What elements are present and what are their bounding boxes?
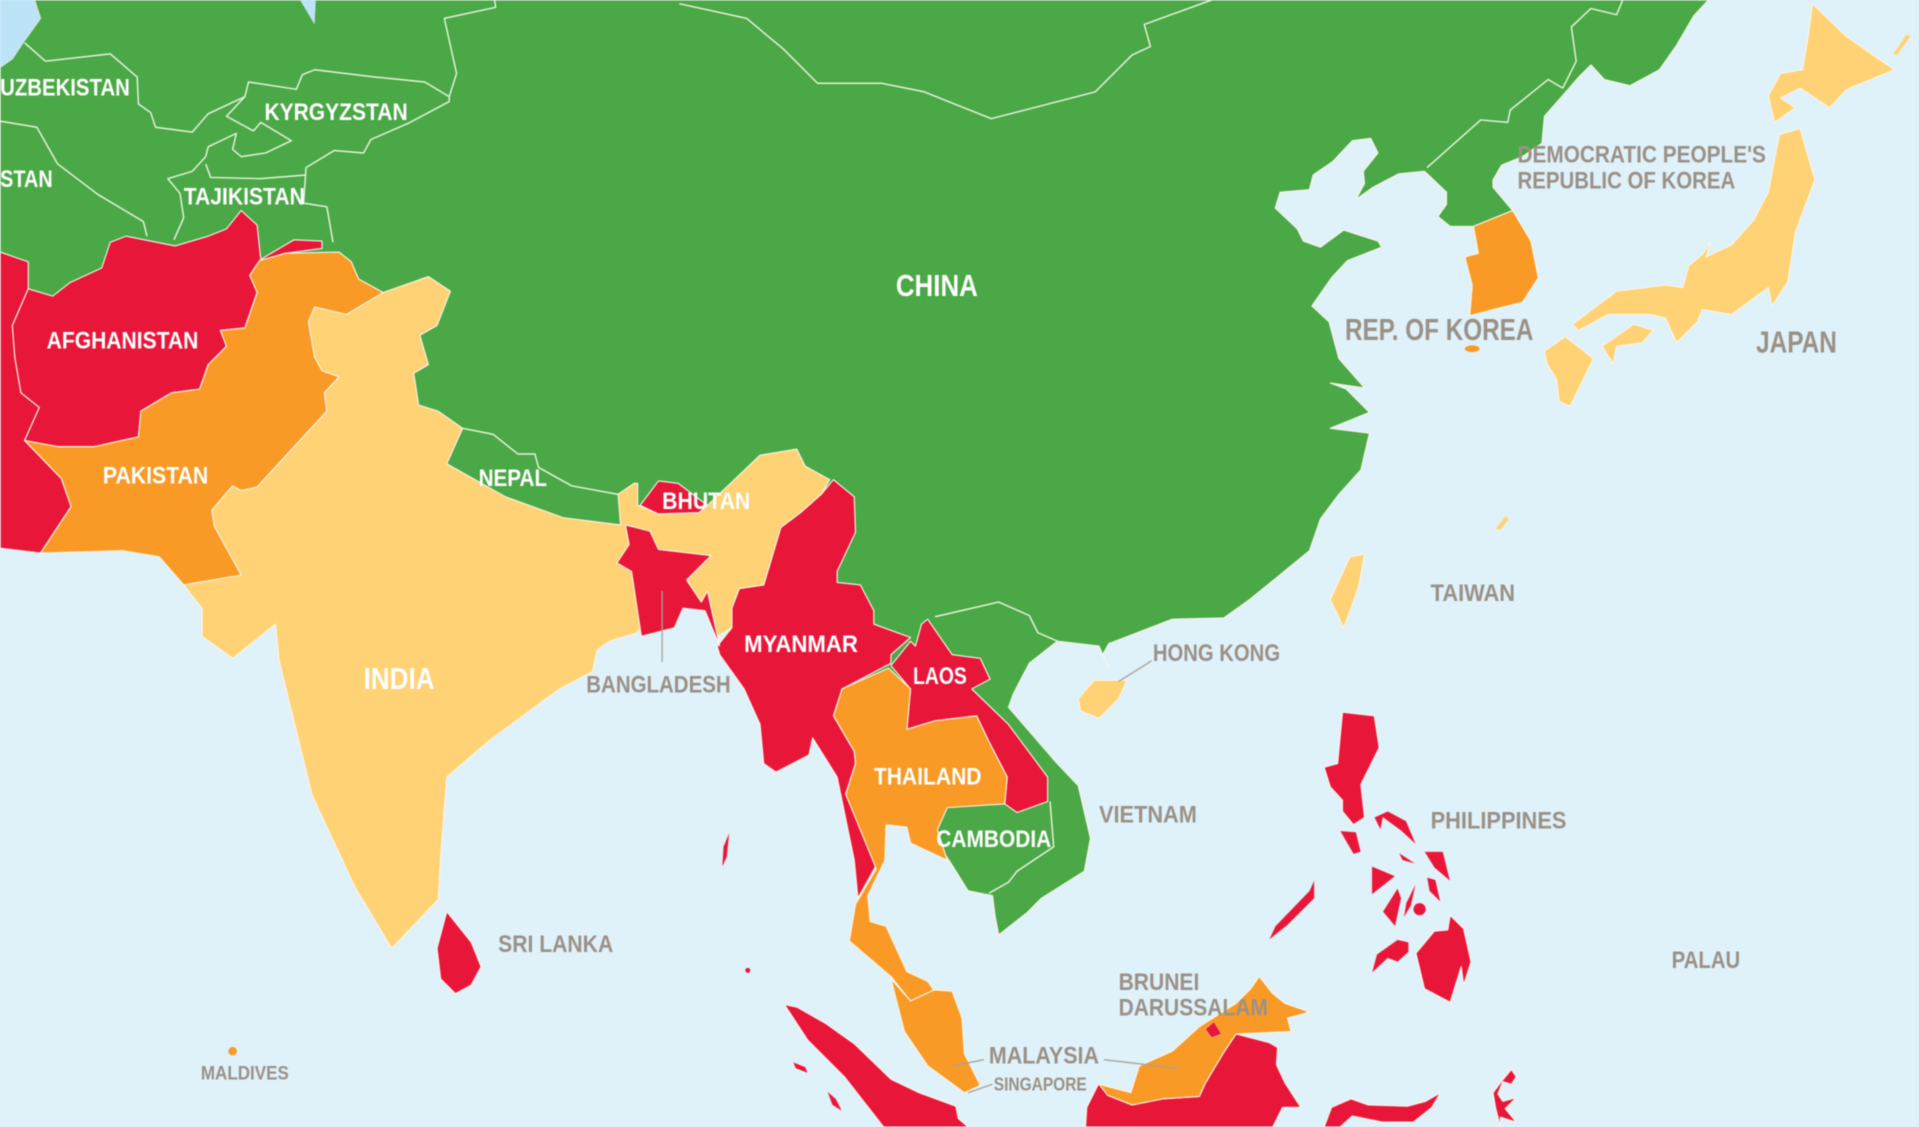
Japan: Kuril island xyxy=(1893,34,1910,55)
Sumatra xyxy=(785,1005,968,1127)
label: Kyrgyzstan: KYRGYZSTAN xyxy=(264,99,408,126)
Philippines: Bohol xyxy=(1413,903,1426,915)
Japan: Hokkaido xyxy=(1768,4,1894,122)
label: Japan: JAPAN xyxy=(1756,325,1837,359)
land: green countries (China, Central Asia, Mongolia, Russia, DPRK, Vietnam, Cambodia, Nepal) xyxy=(0,0,1708,935)
label: India: INDIA xyxy=(364,662,435,696)
Kalimantan xyxy=(1086,1034,1301,1127)
label: Afghanistan: AFGHANISTAN xyxy=(47,328,198,355)
label: Republic of Korea: REP. OF KOREA xyxy=(1345,313,1533,347)
Sulawesi xyxy=(1324,1093,1440,1127)
Andaman Islands xyxy=(722,832,729,868)
Hainan xyxy=(1078,680,1127,718)
label: China: CHINA xyxy=(896,269,978,303)
label: Singapore: SINGAPORE xyxy=(994,1073,1087,1094)
Pakistan xyxy=(25,252,383,585)
Philippines: Samar xyxy=(1424,852,1450,881)
label: Myanmar: MYANMAR xyxy=(744,631,858,658)
Japan: Honshu xyxy=(1573,128,1815,343)
label: DPRK: REPUBLIC OF KOREA xyxy=(1517,167,1736,194)
leader lines xyxy=(662,591,1177,1093)
label: Cambodia: CAMBODIA xyxy=(936,826,1052,853)
Japan: Shikoku xyxy=(1602,324,1653,363)
Philippines: Mindanao xyxy=(1416,915,1471,1002)
water: Lake Balkhash xyxy=(300,0,316,24)
label: Thailand: THAILAND xyxy=(874,763,982,790)
label: Brunei Darussalam: DARUSSALAM xyxy=(1119,995,1268,1022)
label: Brunei Darussalam xyxy=(1119,969,1268,1022)
Maluku xyxy=(1493,1069,1516,1127)
land: pale yellow countries (India, Japan, Taiwan, Hainan) plus Bangladesh and Bhutan xyxy=(184,4,1910,948)
labels: grey country names xyxy=(201,142,1837,1094)
Japan: Ryukyu islands xyxy=(1495,516,1509,530)
label: Pakistan: PAKISTAN xyxy=(103,462,208,489)
label: Vietnam: VIETNAM xyxy=(1099,801,1197,828)
Thailand xyxy=(833,668,1007,1001)
Philippines: Masbate xyxy=(1399,853,1416,864)
Malaysia: Borneo xyxy=(1099,976,1309,1105)
land: orange countries (Pakistan, Thailand, Malaysia, Republic of Korea, Maldives) xyxy=(25,210,1538,1105)
borders: Central and East Asia boundary lines xyxy=(0,0,1623,893)
label: DPRK: DEMOCRATIC PEOPLE'S xyxy=(1517,142,1766,169)
Maldives xyxy=(228,1047,237,1055)
Jeju xyxy=(1465,345,1480,352)
Sumatra outer islands xyxy=(793,1062,808,1073)
land: red countries (Iran, Afghanistan, Myanmar, Laos, Sri Lanka, Indonesia, Philippines) xyxy=(0,210,1516,1127)
label: Taiwan: TAIWAN xyxy=(1431,580,1515,607)
Philippines: Luzon xyxy=(1324,712,1379,825)
Brunei xyxy=(1205,1022,1221,1038)
Laos xyxy=(891,619,1048,813)
Taiwan xyxy=(1330,554,1365,628)
Sri Lanka xyxy=(437,912,481,994)
label: Turkmenistan (cropped): STAN xyxy=(0,166,53,193)
label: Hong Kong: HONG KONG xyxy=(1153,640,1280,667)
label: Malaysia: MALAYSIA xyxy=(989,1042,1099,1069)
label: Maldives: MALDIVES xyxy=(201,1062,289,1084)
Nicobar island xyxy=(745,968,750,973)
Bangladesh xyxy=(617,525,720,646)
water: Caspian Sea xyxy=(0,0,41,67)
Republic of Korea xyxy=(1465,210,1538,316)
label: Bhutan: BHUTAN xyxy=(662,488,750,515)
label: Philippines: PHILIPPINES xyxy=(1431,807,1566,834)
label: Bangladesh: BANGLADESH xyxy=(586,672,731,699)
label: Sri Lanka: SRI LANKA xyxy=(498,931,613,958)
label: DPRK xyxy=(1517,142,1766,194)
Iran xyxy=(0,252,71,553)
Bhutan xyxy=(640,481,707,514)
Philippines: Mindoro xyxy=(1340,831,1361,854)
label: Palau: PALAU xyxy=(1672,947,1740,974)
label: Laos: LAOS xyxy=(913,663,967,690)
Myanmar xyxy=(717,480,911,898)
label: Tajikistan: TAJIKISTAN xyxy=(184,183,305,210)
Sumatra outer island south xyxy=(827,1092,842,1111)
India xyxy=(184,277,830,948)
label: Uzbekistan: UZBEKISTAN xyxy=(0,74,130,101)
Japan: Kyushu xyxy=(1544,337,1593,406)
Philippines: Negros xyxy=(1383,888,1401,926)
Philippines: Panay xyxy=(1372,866,1395,895)
Philippines: Bicol xyxy=(1374,811,1416,844)
Philippines: Leyte xyxy=(1427,877,1440,902)
Malaysia: peninsula xyxy=(891,979,980,1093)
Afghanistan xyxy=(12,210,322,447)
Philippines: Zamboanga xyxy=(1372,940,1409,973)
Philippines: Cebu xyxy=(1404,883,1416,918)
label: Nepal: NEPAL xyxy=(479,465,547,492)
labels: white country names xyxy=(0,74,1052,853)
Philippines: Palawan xyxy=(1269,880,1314,940)
label: Brunei Darussalam: BRUNEI xyxy=(1119,969,1199,996)
